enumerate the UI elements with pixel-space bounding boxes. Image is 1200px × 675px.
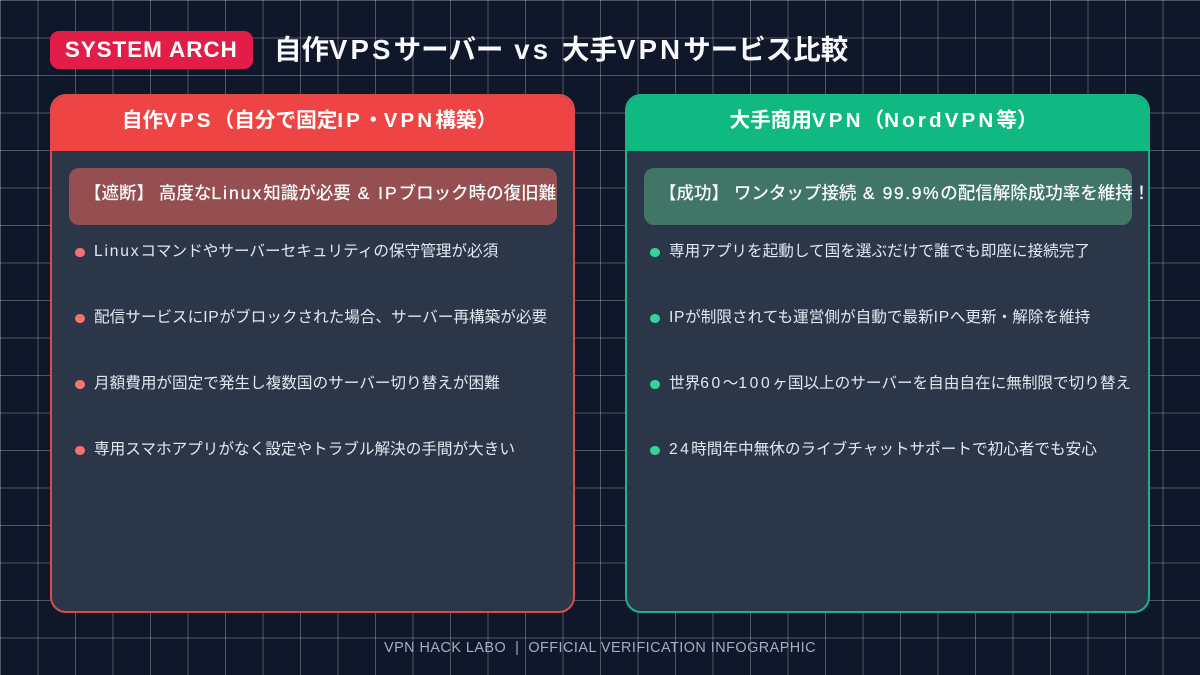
badge: SYSTEM ARCH — [50, 31, 252, 69]
callout: success: 【成功】 ワンタップ接続 & 99.9%の配信解除成功率を維持！ — [659, 183, 1150, 203]
callout: success — [644, 168, 1132, 225]
list item 2: IPが制限されても運営側が自動で最新IPへ更新・解除を維持 — [669, 309, 1090, 326]
badge: SYSTEM ARCH: SYSTEM ARCH — [65, 37, 238, 62]
callout: blocked: 【遮断】 高度なLinux知識が必要 & IPブロック時の復旧難 — [84, 183, 556, 203]
list item 2: 配信サービスにIPがブロックされた場合、サーバー再構築が必要 — [94, 309, 547, 326]
panel heading: self-built VPS — [50, 94, 575, 151]
list item 3: 世界60〜100ヶ国以上のサーバーを自由自在に無制限で切り替え — [669, 375, 1131, 392]
footer: VPN HACK LABO | OFFICIAL VERIFICATION INFOGRAPHIC — [384, 640, 816, 656]
panel heading: commercial VPN — [625, 94, 1150, 151]
panel: commercial VPN — [625, 94, 1150, 612]
list item 3: 月額費用が固定で発生し複数国のサーバー切り替えが困難 — [94, 375, 500, 392]
list item 4: 24時間年中無休のライブチャットサポートで初心者でも安心 — [669, 441, 1097, 458]
list item 4: 専用スマホアプリがなく設定やトラブル解決の手間が大きい — [94, 441, 515, 458]
callout: blocked — [69, 168, 557, 225]
panel: self-built VPS — [50, 94, 575, 612]
list item 1: Linuxコマンドやサーバーセキュリティの保守管理が必須 — [94, 243, 498, 260]
panel heading: commercial VPN: 大手商用VPN（NordVPN等） — [729, 109, 1038, 132]
list item 1: 専用アプリを起動して国を選ぶだけで誰でも即座に接続完了 — [669, 243, 1090, 260]
title: 自作VPSサーバー vs 大手VPNサービス比較 — [274, 34, 848, 65]
panel heading: self-built VPS: 自作VPS（自分で固定IP・VPN構築） — [122, 109, 497, 132]
